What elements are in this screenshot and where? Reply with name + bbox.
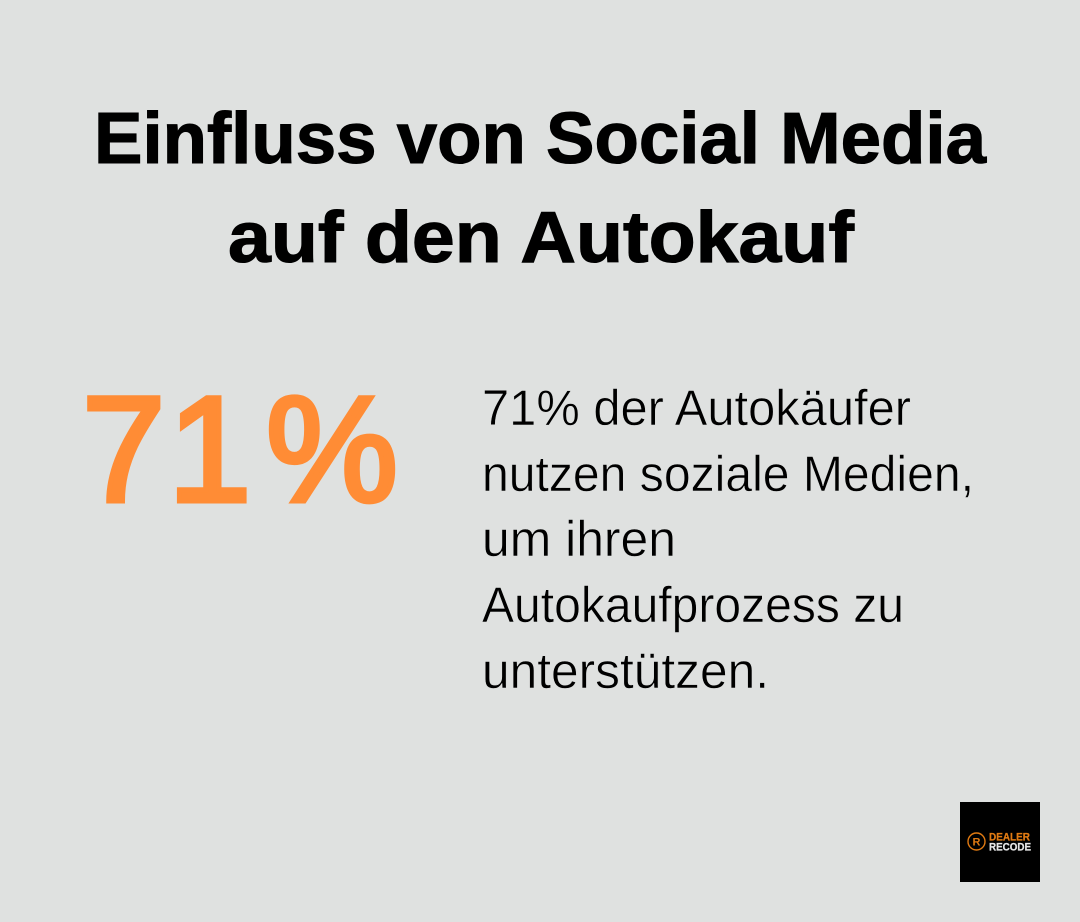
logo: Dealer Recode: DEALER	[989, 832, 1030, 844]
big statistic: 71%: 1	[168, 365, 251, 533]
title: Einfluss von Social Media	[94, 99, 987, 179]
big statistic: 71%	[82, 365, 398, 533]
statistic description: um ihren	[482, 511, 676, 567]
big statistic: 71%: %	[266, 365, 398, 533]
title	[94, 99, 987, 278]
statistic description: Autokaufprozess zu	[482, 577, 904, 633]
logo: Dealer Recode: R	[973, 836, 981, 848]
logo: Dealer Recode	[960, 802, 1040, 882]
title: auf den Autokauf	[228, 198, 855, 278]
statistic description: unterstützen.	[482, 643, 769, 699]
big statistic: 71%: 7	[82, 365, 165, 533]
logo: Dealer Recode: RECODE	[989, 842, 1031, 854]
statistic description: nutzen soziale Medien,	[482, 446, 974, 502]
statistic description: 71% der Autokäufer	[482, 380, 911, 436]
statistic description	[482, 380, 974, 699]
